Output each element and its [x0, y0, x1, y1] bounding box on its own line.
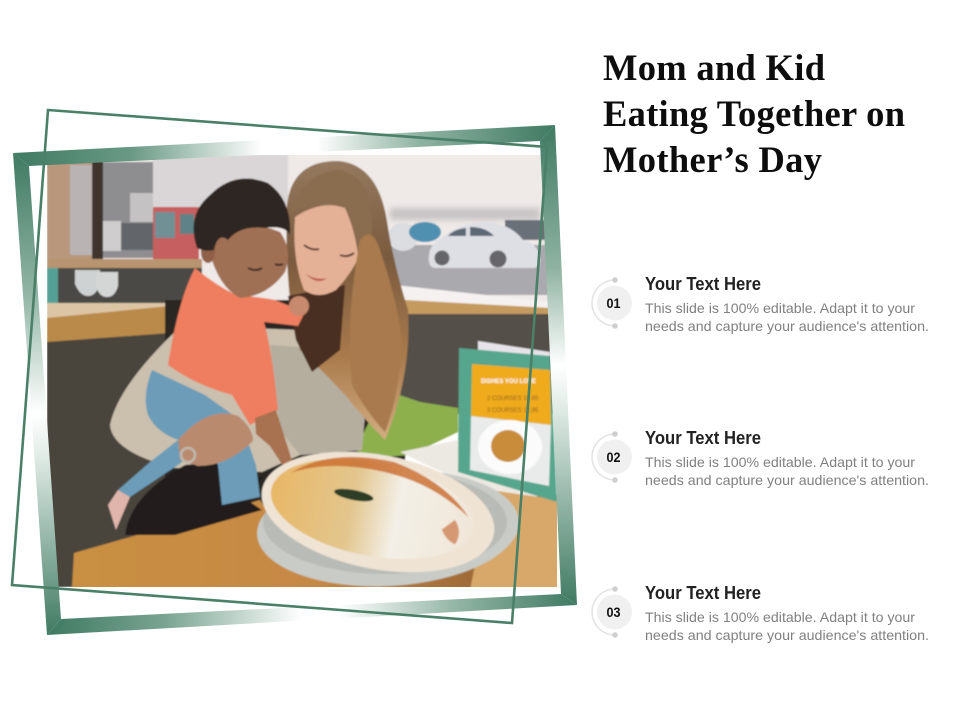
trees	[390, 208, 540, 220]
red van	[153, 207, 199, 259]
upper right wood ledge	[404, 299, 548, 315]
window background	[102, 155, 557, 302]
woman face	[294, 205, 365, 295]
child jeans	[108, 370, 260, 530]
body 01	[645, 300, 929, 334]
woman facial features	[304, 245, 354, 281]
frame right band	[540, 125, 577, 605]
title: Mother’s Day	[603, 139, 822, 180]
hair front strands	[312, 170, 371, 252]
right seat	[400, 314, 560, 414]
woman sweater and arm	[110, 325, 366, 535]
menu card: DISHES YOU LOVE	[481, 379, 536, 385]
number badge 01	[592, 277, 632, 329]
teal card	[47, 268, 58, 312]
item 01	[592, 273, 929, 334]
body 02: needs and capture your audience's attention.	[645, 472, 929, 488]
pizza	[260, 450, 495, 573]
child head skin	[207, 225, 288, 298]
title	[603, 47, 905, 180]
green bag	[355, 390, 458, 458]
heading 01: Your Text Here	[645, 273, 761, 294]
wood ledge	[47, 259, 202, 269]
background cars	[388, 220, 547, 251]
body 02: This slide is 100% editable. Adapt it to your	[645, 454, 915, 470]
booth back	[56, 267, 203, 304]
frame top band	[13, 125, 555, 166]
white car	[429, 222, 540, 268]
child orange top	[168, 268, 305, 425]
thick gradient frame	[13, 125, 577, 635]
wooden table left	[47, 302, 166, 343]
menu card	[458, 341, 557, 502]
patterned wall	[153, 155, 288, 207]
body 01: needs and capture your audience's attention.	[645, 318, 929, 334]
item 03	[592, 582, 929, 643]
heading 02: Your Text Here	[645, 427, 761, 448]
heading 03: Your Text Here	[645, 582, 761, 603]
title: Eating Together on	[603, 93, 905, 134]
number badge 02	[592, 431, 632, 483]
number badge 03	[592, 586, 632, 638]
left wall and wood panel	[47, 155, 153, 263]
window sill	[400, 285, 548, 307]
body 03	[645, 609, 929, 643]
menu card: 2 COURSES 10.95	[487, 396, 539, 402]
left seat	[47, 333, 170, 587]
body 01: This slide is 100% editable. Adapt it to your	[645, 300, 915, 316]
body 02	[645, 454, 929, 488]
child hand and mother hand	[178, 296, 309, 472]
menu card: 3 COURSES 12.95	[487, 408, 539, 414]
woman hair	[286, 161, 409, 440]
number badge 02: 02	[606, 449, 621, 465]
frame left band	[13, 153, 61, 635]
wooden table front	[72, 495, 560, 590]
white table top	[400, 440, 536, 496]
child eye and ear	[200, 248, 284, 272]
wine glasses	[75, 270, 118, 297]
frame bottom band	[47, 594, 577, 635]
item 02	[592, 427, 929, 488]
outdoor road	[385, 245, 550, 295]
photo: mother and child with pizza	[47, 150, 562, 593]
number badge 01: 01	[606, 295, 621, 311]
body 03: needs and capture your audience's attention.	[645, 627, 929, 643]
dark hair under chin	[288, 285, 345, 372]
shadow behind figures	[165, 300, 405, 530]
title: Mom and Kid	[603, 47, 825, 88]
plate	[256, 472, 518, 587]
number badge 03: 03	[606, 604, 621, 620]
body 03: This slide is 100% editable. Adapt it to your	[645, 609, 915, 625]
child curly hair	[194, 179, 290, 251]
thin green frame	[12, 110, 547, 623]
